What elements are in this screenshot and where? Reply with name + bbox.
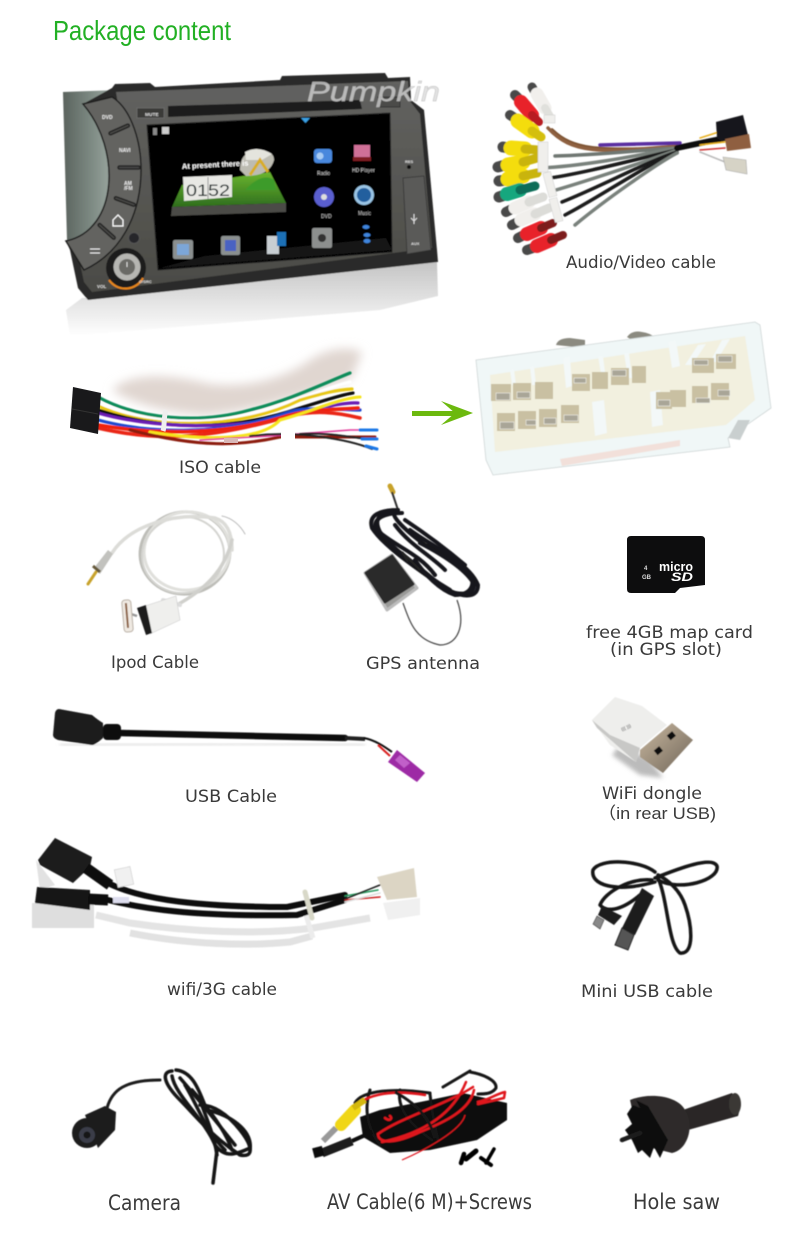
button crescent	[66, 97, 141, 270]
dock icons	[173, 240, 193, 259]
tags	[114, 867, 134, 887]
micro sd card: 4	[644, 566, 648, 572]
label: hole saw: Hole saw	[633, 1190, 720, 1214]
wifi dongle: ((( )))	[620, 723, 632, 732]
black plug	[322, 1141, 352, 1153]
white connector	[377, 868, 417, 900]
usb cable	[53, 709, 425, 782]
watermark: Pumpkin	[307, 76, 440, 107]
metal pins	[496, 356, 732, 429]
wifi 3g cable	[32, 838, 420, 944]
micro sd card	[627, 536, 705, 593]
rca plug	[341, 1110, 355, 1125]
camera	[72, 1070, 250, 1183]
head unit: AM	[124, 181, 132, 187]
hole saw	[622, 1093, 741, 1158]
micro sd card: SD	[671, 570, 693, 584]
wall shadow	[112, 349, 362, 415]
disc slot	[168, 100, 362, 117]
clock widget	[172, 172, 286, 207]
iso plug	[70, 387, 101, 434]
label: wifi dongle	[598, 784, 716, 823]
label: ipod cable: Ipod Cable	[111, 653, 199, 673]
mute button	[137, 108, 164, 118]
label: wifi 3g cable: wifi/3G cable	[167, 980, 277, 1000]
chassis	[63, 90, 118, 240]
thin wire	[403, 600, 461, 645]
head unit: /FM	[124, 186, 133, 192]
head unit: DVD	[102, 115, 113, 121]
audio video cable	[498, 87, 751, 250]
label: mini usb cable: Mini USB cable	[581, 982, 713, 1002]
dividers	[510, 339, 730, 436]
pin cavities	[491, 354, 736, 431]
label: wifi dongle: WiFi dongle	[602, 784, 702, 804]
head unit: Music	[358, 211, 372, 217]
black coil mass	[360, 1093, 507, 1153]
app icons	[314, 149, 332, 163]
head unit: AUX	[411, 241, 420, 246]
reflection	[66, 262, 438, 336]
head unit: Radio	[317, 171, 330, 177]
cables	[108, 884, 380, 915]
status icons	[153, 128, 157, 135]
white connector	[476, 322, 771, 475]
screws	[461, 1149, 494, 1165]
cable ties	[163, 410, 166, 431]
label: audio video cable: Audio/Video cable	[566, 253, 716, 273]
connectors	[716, 115, 748, 141]
head unit	[63, 73, 440, 336]
bezel	[66, 73, 438, 300]
label: wifi dongle: （in rear USB)	[598, 804, 716, 823]
rca plugs	[498, 87, 563, 250]
ipod cable	[88, 506, 245, 635]
micro sd card: GB	[642, 575, 652, 581]
arrow	[412, 401, 473, 425]
gps antenna	[365, 486, 478, 645]
label: map card: free 4GB map card	[586, 623, 753, 643]
wifi dongle	[592, 697, 693, 778]
puck	[365, 555, 417, 610]
head unit: VOL	[97, 284, 107, 289]
head unit: HD Player	[352, 168, 375, 174]
plugs	[38, 838, 92, 883]
title: Package content	[53, 15, 231, 46]
label: map card	[586, 623, 753, 660]
mini usb cable	[593, 862, 717, 953]
label: av cable: AV Cable(6 M)+Screws	[327, 1190, 532, 1214]
head unit: MUTE	[145, 112, 159, 118]
cable tags	[538, 115, 563, 223]
volume knob	[106, 248, 146, 288]
label: map card: (in GPS slot)	[610, 640, 722, 660]
wires	[540, 128, 725, 225]
purple plug	[388, 750, 425, 782]
home icon	[113, 215, 123, 226]
screen	[147, 113, 392, 270]
iso cable	[70, 349, 377, 449]
head unit: At present there is	[182, 159, 249, 171]
micro sd card: micro	[659, 559, 693, 574]
head unit: NAVI	[119, 148, 131, 154]
av cable and screws	[312, 1071, 507, 1165]
back icon	[90, 249, 100, 253]
label: camera: Camera	[108, 1191, 181, 1215]
head unit: 0152	[186, 181, 230, 200]
head unit: RES	[405, 159, 414, 164]
label: gps antenna: GPS antenna	[366, 654, 480, 674]
reflection	[32, 860, 420, 944]
wires	[98, 373, 377, 449]
label: iso cable: ISO cable	[179, 458, 261, 478]
head unit: DVD	[321, 214, 332, 220]
head unit: O/SRC	[139, 279, 152, 284]
coiled cable	[371, 510, 478, 596]
teeth	[625, 1100, 668, 1158]
side panel	[403, 176, 431, 254]
label: usb cable: USB Cable	[185, 787, 277, 807]
